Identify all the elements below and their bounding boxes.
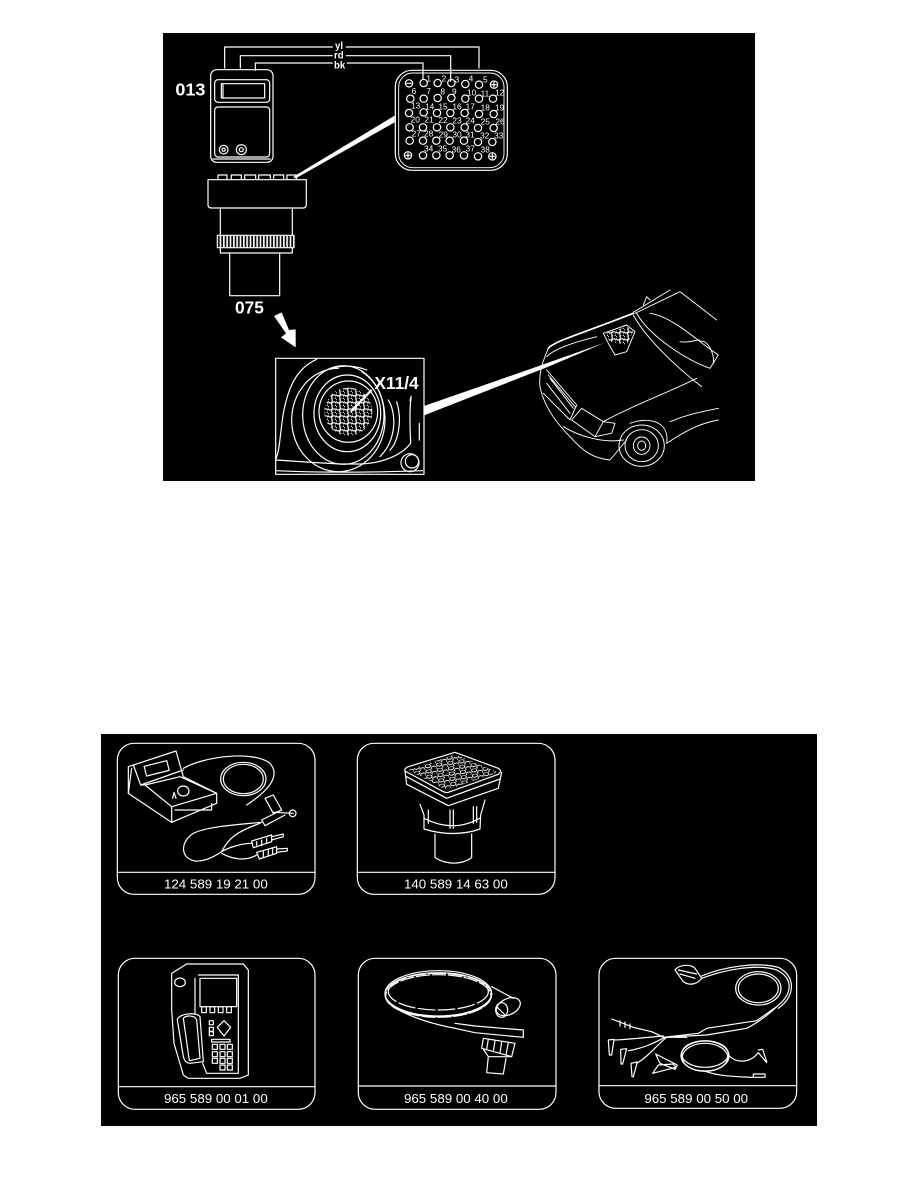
- inset: diagnostic socket X11/4: [276, 358, 424, 474]
- label X11/4: X11/4: [374, 373, 419, 393]
- pin connector socket with numbered pins: 16: [452, 102, 462, 112]
- pin connector socket with numbered pins: 15: [438, 102, 448, 112]
- pin connector socket with numbered pins: 6: [412, 86, 417, 96]
- pin connector socket with numbered pins: 10: [467, 88, 477, 98]
- card: lead set 965 589 00 50 00: [599, 958, 797, 1108]
- arrow: [274, 312, 296, 347]
- pin connector socket with numbered pins: 21: [424, 114, 434, 124]
- wires with colour labels: bk: [334, 61, 346, 72]
- card: lead set 965 589 00 50 00: 965 589 00 50 00: [644, 1091, 748, 1106]
- card: tester 124 589 19 21 00: [117, 743, 315, 894]
- pin connector socket with numbered pins: 35: [438, 144, 448, 154]
- pin connector socket with numbered pins: 7: [426, 86, 431, 96]
- pin connector socket with numbered pins: 1: [426, 73, 431, 83]
- illustration: car front: [540, 290, 718, 466]
- pin connector socket with numbered pins: 20: [411, 114, 420, 124]
- wires with colour labels: yl: [335, 41, 343, 52]
- wedge pointer to vehicle: [424, 343, 605, 415]
- lower diagram: connector X11/4 and vehicle: [235, 290, 718, 474]
- icon: adapter: [405, 752, 502, 863]
- upper diagram: tester, wiring and pin connector: [175, 41, 507, 296]
- bottom row of tool cards: [118, 958, 556, 1109]
- pin connector socket with numbered pins: 38: [481, 145, 490, 155]
- pin connector socket with numbered pins: 34: [424, 144, 434, 154]
- pin connector socket with numbered pins: 2: [442, 73, 447, 83]
- part number 013: 013: [175, 79, 205, 99]
- pin connector socket with numbered pins: 9: [452, 87, 457, 97]
- pin connector socket with numbered pins: 18: [481, 102, 490, 112]
- icon: coiled cable with plugs: [385, 971, 523, 1074]
- card: handheld tester 965 589 00 01 00: 965 589 00 01 00: [164, 1091, 268, 1106]
- pin connector socket with numbered pins: [395, 70, 507, 170]
- pin connector socket with numbered pins: 28: [424, 129, 434, 139]
- pin connector socket with numbered pins: 23: [452, 116, 462, 126]
- part number 075: 075: [235, 297, 264, 317]
- pin connector socket with numbered pins: 19: [495, 102, 505, 112]
- adapter 075: [208, 175, 306, 296]
- pin connector socket with numbered pins: 5: [483, 74, 488, 84]
- pin connector socket with numbered pins: 27: [412, 129, 421, 139]
- pin connector socket with numbered pins: 11: [481, 89, 490, 99]
- pin connector socket with numbered pins: 31: [465, 129, 475, 139]
- card: handheld tester 965 589 00 01 00: [118, 958, 315, 1109]
- icon: tester with leads: [128, 751, 296, 861]
- wires with colour labels: rd: [334, 51, 344, 62]
- pin connector socket with numbered pins: 37: [466, 144, 475, 154]
- wedge pointer to socket: [293, 116, 395, 178]
- panel: required tools: [101, 734, 817, 1126]
- card: tester 124 589 19 21 00: 124 589 19 21 00: [164, 877, 268, 892]
- pin connector socket with numbered pins: 33: [494, 130, 504, 140]
- pin connector socket with numbered pins: 29: [439, 129, 448, 139]
- card: cable 965 589 00 40 00: 965 589 00 40 00: [404, 1091, 508, 1106]
- pin connector socket with numbered pins: 14: [425, 102, 435, 112]
- pin connector socket with numbered pins: 22: [438, 115, 448, 125]
- card: cable 965 589 00 40 00: [358, 958, 556, 1109]
- pin connector socket with numbered pins: 17: [466, 102, 475, 112]
- panel: connection diagram: [163, 33, 755, 481]
- pin connector socket with numbered pins: 32: [480, 130, 490, 140]
- pin connector socket with numbered pins: 4: [469, 74, 474, 84]
- icon: tester 013: [211, 70, 273, 162]
- pin connector socket with numbered pins: 24: [466, 116, 475, 126]
- pin connector socket with numbered pins: 36: [452, 144, 461, 154]
- pin connector socket with numbered pins: 25: [481, 117, 490, 127]
- card: adapter 140 589 14 63 00: [357, 743, 555, 894]
- top row of tool cards: [117, 743, 555, 894]
- pin connector socket with numbered pins: 3: [455, 74, 460, 84]
- wires with colour labels: [225, 41, 479, 81]
- pin connector socket with numbered pins: 30: [452, 129, 462, 139]
- icon: handheld tester: [172, 964, 248, 1078]
- pin connector socket with numbered pins: 26: [495, 116, 505, 126]
- callout leader line: [351, 390, 372, 412]
- card: adapter 140 589 14 63 00: 140 589 14 63 00: [404, 877, 508, 892]
- pin connector socket with numbered pins: 12: [495, 88, 505, 98]
- pin connector socket with numbered pins: 13: [411, 101, 421, 111]
- icon: lead set with clips: [608, 965, 791, 1077]
- pin connector socket with numbered pins: 8: [440, 87, 445, 97]
